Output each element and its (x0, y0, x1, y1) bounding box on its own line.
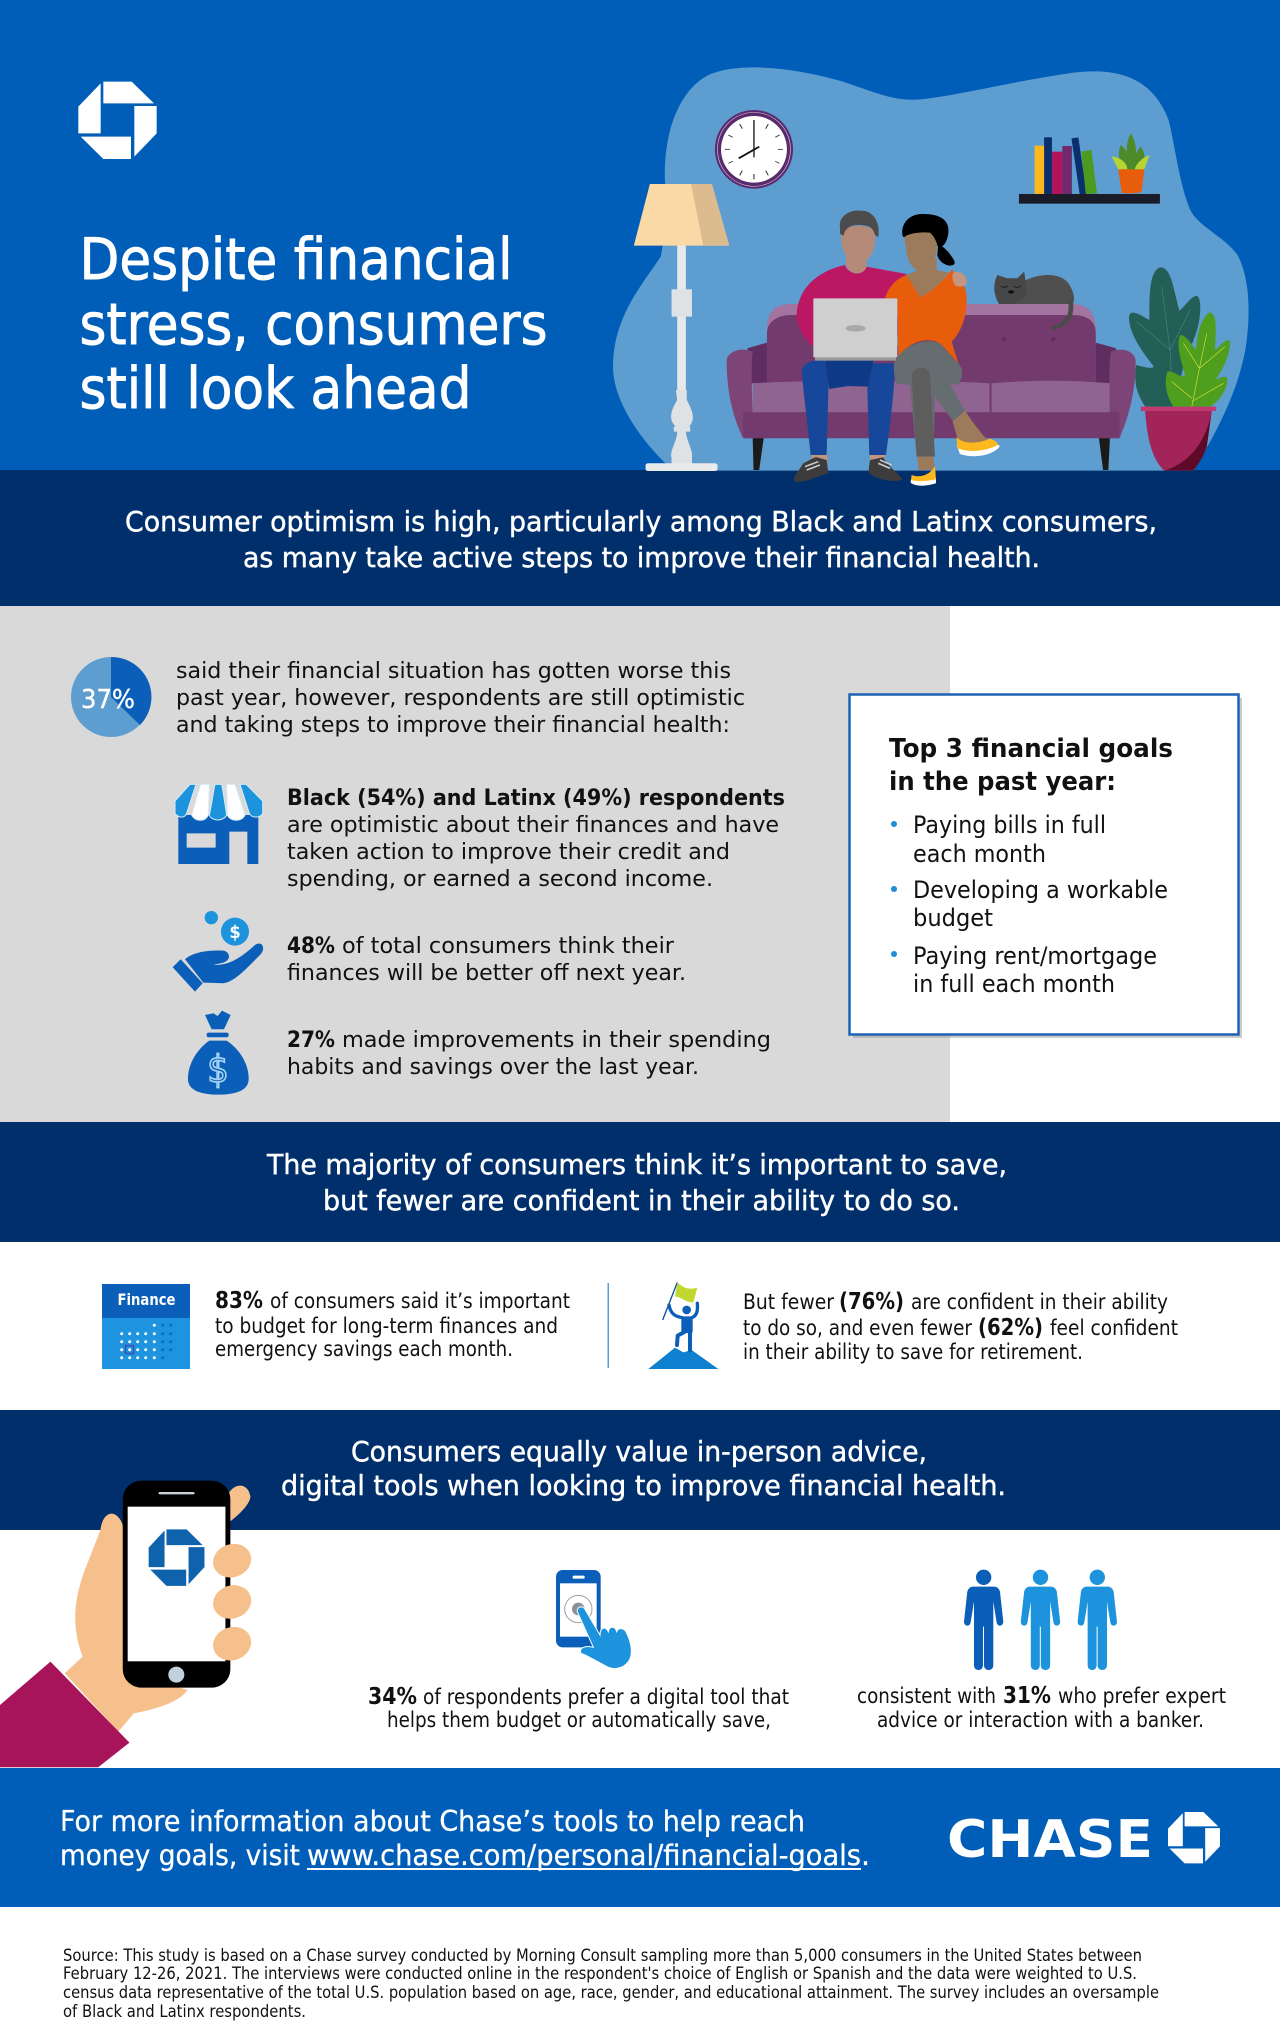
potted plant (1129, 267, 1230, 471)
smartphone (123, 1481, 230, 1688)
text: 27% improvements: 27% (287, 1027, 335, 1053)
text: 83% important to budget (215, 1288, 570, 1362)
call to action text (60, 1805, 870, 1872)
goals heading: in the past year: (889, 767, 1116, 797)
pie chart: 37%: 37% (81, 685, 135, 715)
text: 83% important to budget: emergency savings each month. (215, 1337, 513, 1362)
text: 48% better off: of total consumers think their (342, 933, 675, 959)
text: 76% and 62% confident: in their ability to save for retirement. (743, 1340, 1083, 1365)
panel: hero (0, 0, 1280, 486)
goal: rent or mortgage: Paying rent/mortgage (913, 942, 1157, 970)
man (794, 211, 907, 482)
illustration: hand holding smartphone (0, 1481, 256, 1767)
text: 27% improvements: made improvements in their spending (342, 1027, 771, 1053)
panel: top 3 financial goals (850, 694, 1242, 1038)
text: Black and Latinx respondents: spending, or earned a second income. (287, 866, 713, 892)
panel: survey findings (0, 606, 950, 1122)
text: 83% important to budget: to budget for long-term finances and (215, 1314, 558, 1339)
phone logo (149, 1529, 204, 1586)
text: source note: census data representative of the total U.S. population based on age, race, gender, and educational attainment. The survey includes an oversample (63, 1983, 1159, 2002)
icon: hand with coin (173, 911, 263, 992)
call to action text: www.chase.com/personal/financial-goals (307, 1839, 861, 1872)
banner heading: as many take active steps to improve their financial health. (243, 541, 1040, 574)
panel: advice banner (0, 1410, 1280, 1530)
text: 31% prefer expert advice (857, 1683, 1226, 1733)
cat (994, 272, 1074, 328)
text: intro statement (176, 658, 745, 738)
banner heading: digital tools when looking to improve financial health. (281, 1469, 1006, 1502)
goal: workable budget: budget (913, 904, 993, 932)
call to action text: For more information about Chase’s tools to help reach (60, 1805, 805, 1838)
text: 48% better off: 48% (287, 933, 335, 959)
icon: hand with coin: $ (229, 923, 241, 943)
text: 31% prefer expert advice: advice or interaction with a banker. (877, 1708, 1204, 1733)
goal: workable budget: Developing a workable (913, 876, 1168, 904)
text: 27% improvements (287, 1027, 771, 1080)
goal: rent or mortgage (891, 942, 1157, 998)
text: 34% prefer digital tool: of respondents prefer a digital tool that (423, 1685, 789, 1710)
text: source note: Source: This study is based on a Chase survey conducted by Morning Consult sampling more than 5,000 consumers in the United States between (63, 1946, 1142, 1965)
text: 83% important to budget: 83% (215, 1288, 263, 1314)
woman (885, 214, 999, 486)
text: source note (63, 1946, 1159, 2021)
icon: three people (964, 1570, 1117, 1670)
goal: paying bills: Paying bills in full (913, 811, 1106, 839)
text: 76% and 62% confident (743, 1289, 1178, 1365)
sofa (727, 304, 1136, 470)
icon: money bag: $ (207, 1047, 229, 1091)
text: source note: February 12-26, 2021. The interviews were conducted online in the respondent's choice of English or Spanish and the data were weighted to U.S. (63, 1964, 1137, 1983)
text: 76% and 62% confident: are confident in their ability (911, 1290, 1168, 1315)
text: 83% important to budget: of consumers said it’s important (270, 1289, 570, 1314)
wall blob (613, 67, 1249, 471)
shelf plant (1112, 133, 1149, 193)
fingers (208, 1541, 256, 1664)
icon: money bag (188, 1011, 249, 1095)
banner heading (266, 1148, 1007, 1217)
text: Black and Latinx respondents (287, 786, 785, 892)
text: 76% and 62% confident: to do so, and even fewer (743, 1316, 972, 1341)
icon: finance calendar (102, 1284, 190, 1369)
text: 31% prefer expert advice: consistent with (857, 1684, 996, 1709)
text: 34% prefer digital tool: helps them budget or automatically save, (387, 1708, 771, 1733)
icon: finance calendar: Finance (118, 1290, 176, 1309)
panel: consumer optimism banner (0, 470, 1280, 606)
laptop (813, 298, 897, 361)
wall clock (715, 110, 793, 189)
text: 34% prefer digital tool (368, 1684, 789, 1733)
icon: Chase octagon logo small (1168, 1812, 1220, 1863)
icon: storefront (175, 784, 263, 864)
panel: saving banner (0, 1122, 1280, 1242)
title: still look ahead (80, 356, 472, 422)
logo: CHASE wordmark: CHASE (947, 1810, 1153, 1870)
text: Black and Latinx respondents: are optimistic about their finances and have (287, 812, 779, 838)
goal: workable budget (891, 876, 1168, 932)
goals heading: Top 3 financial goals (889, 734, 1173, 764)
panel: saving statistics (102, 1282, 1178, 1369)
goal: paying bills: each month (913, 840, 1046, 868)
title (80, 227, 548, 422)
text: 31% prefer expert advice: 31% (1003, 1683, 1051, 1709)
text: intro statement: said their financial situation has gotten worse this (176, 658, 731, 684)
call to action text: . (861, 1839, 870, 1872)
goal: rent or mortgage: in full each month (913, 970, 1115, 998)
floor lamp (634, 184, 729, 471)
sleeve (0, 1662, 129, 1767)
banner heading (281, 1435, 1006, 1502)
text: 76% and 62% confident: But fewer (743, 1290, 834, 1315)
goal: paying bills (891, 811, 1106, 868)
icon: finger tapping phone (556, 1570, 631, 1669)
text: 76% and 62% confident: feel confident (1050, 1316, 1178, 1341)
banner heading: but fewer are confident in their ability to do so. (323, 1184, 960, 1217)
text: source note: of Black and Latinx respondents. (63, 2002, 306, 2021)
icon: person with flag on a summit (648, 1282, 718, 1369)
text: Black and Latinx respondents: Black (54%) and Latinx (49%) respondents (287, 786, 785, 811)
goals heading (889, 734, 1173, 797)
man and woman with laptop (794, 211, 999, 486)
text: 76% and 62% confident: (76%) (839, 1289, 904, 1315)
text: 27% improvements: habits and savings over the last year. (287, 1054, 699, 1080)
shelf with books (1019, 137, 1160, 204)
text: intro statement: and taking steps to improve their financial health: (176, 712, 730, 738)
banner heading (125, 505, 1157, 574)
text: Black and Latinx respondents: taken action to improve their credit and (287, 839, 730, 865)
illustration: living room (613, 67, 1249, 471)
text: 34% prefer digital tool: 34% (368, 1684, 417, 1710)
panel: call to action footer (0, 1768, 1280, 1907)
banner heading: The majority of consumers think it’s important to save, (266, 1148, 1007, 1181)
text: 48% better off (287, 933, 686, 986)
call to action text: money goals, visit (60, 1839, 300, 1872)
text: intro statement: past year, however, respondents are still optimistic (176, 685, 745, 711)
banner heading: Consumers equally value in-person advice, (351, 1435, 927, 1468)
icon: Chase octagon logo (78, 82, 157, 159)
pie chart: 37% (71, 657, 151, 737)
text: 76% and 62% confident: (62%) (978, 1315, 1043, 1341)
text: 31% prefer expert advice: who prefer expert (1058, 1684, 1226, 1709)
title: Despite financial (80, 227, 512, 293)
text: 48% better off: finances will be better off next year. (287, 960, 686, 986)
banner heading: Consumer optimism is high, particularly among Black and Latinx consumers, (125, 505, 1157, 538)
title: stress, consumers (80, 292, 548, 358)
